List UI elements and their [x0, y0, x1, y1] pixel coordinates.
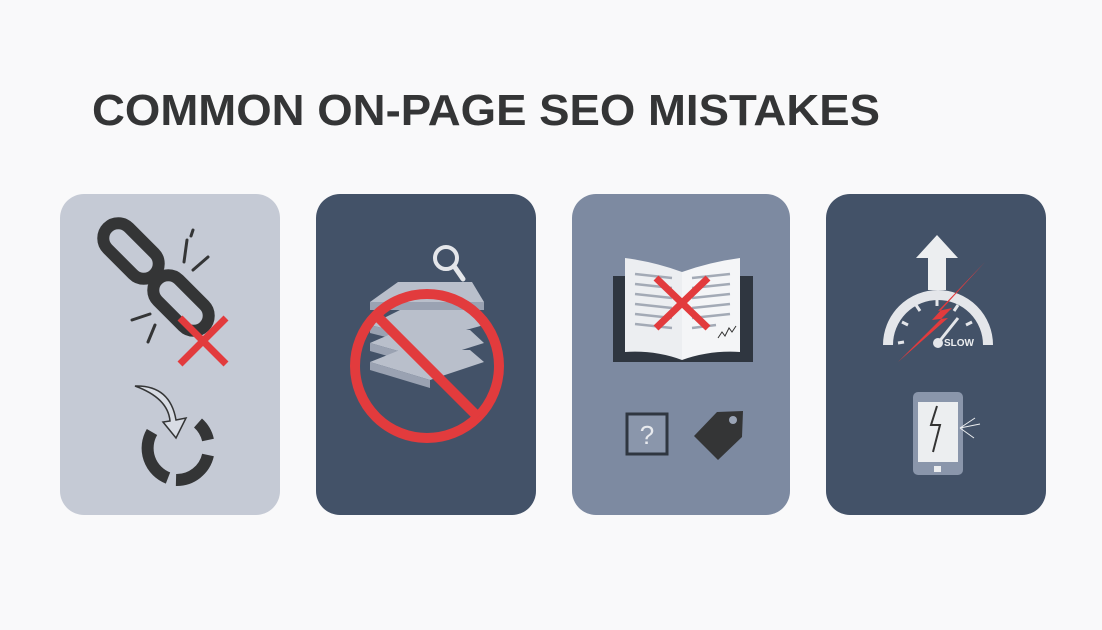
icon: question box [627, 414, 667, 454]
panel: duplicate content [316, 194, 536, 515]
icon: stacked layers [370, 282, 484, 388]
icon: red lightning [898, 262, 985, 362]
panel: missing meta / thin content [572, 194, 790, 515]
icon: speed gauge [888, 235, 988, 362]
icon: broken chain [97, 217, 226, 364]
icon: open book [613, 258, 753, 362]
panel: slow speed / mobile [826, 194, 1046, 515]
title: COMMON ON-PAGE SEO MISTAKES [92, 86, 880, 135]
icon: question box: ? [640, 420, 654, 450]
icon: magnifier [435, 247, 463, 279]
icon: tag [694, 411, 743, 460]
icon: cracked phone [913, 392, 980, 475]
icon: prohibition sign [355, 294, 499, 438]
icon: speed gauge: SLOW [944, 338, 975, 349]
icon: redirect arrow and broken ring [135, 386, 208, 480]
icon: red x [180, 318, 226, 364]
panel: broken links [60, 194, 280, 515]
